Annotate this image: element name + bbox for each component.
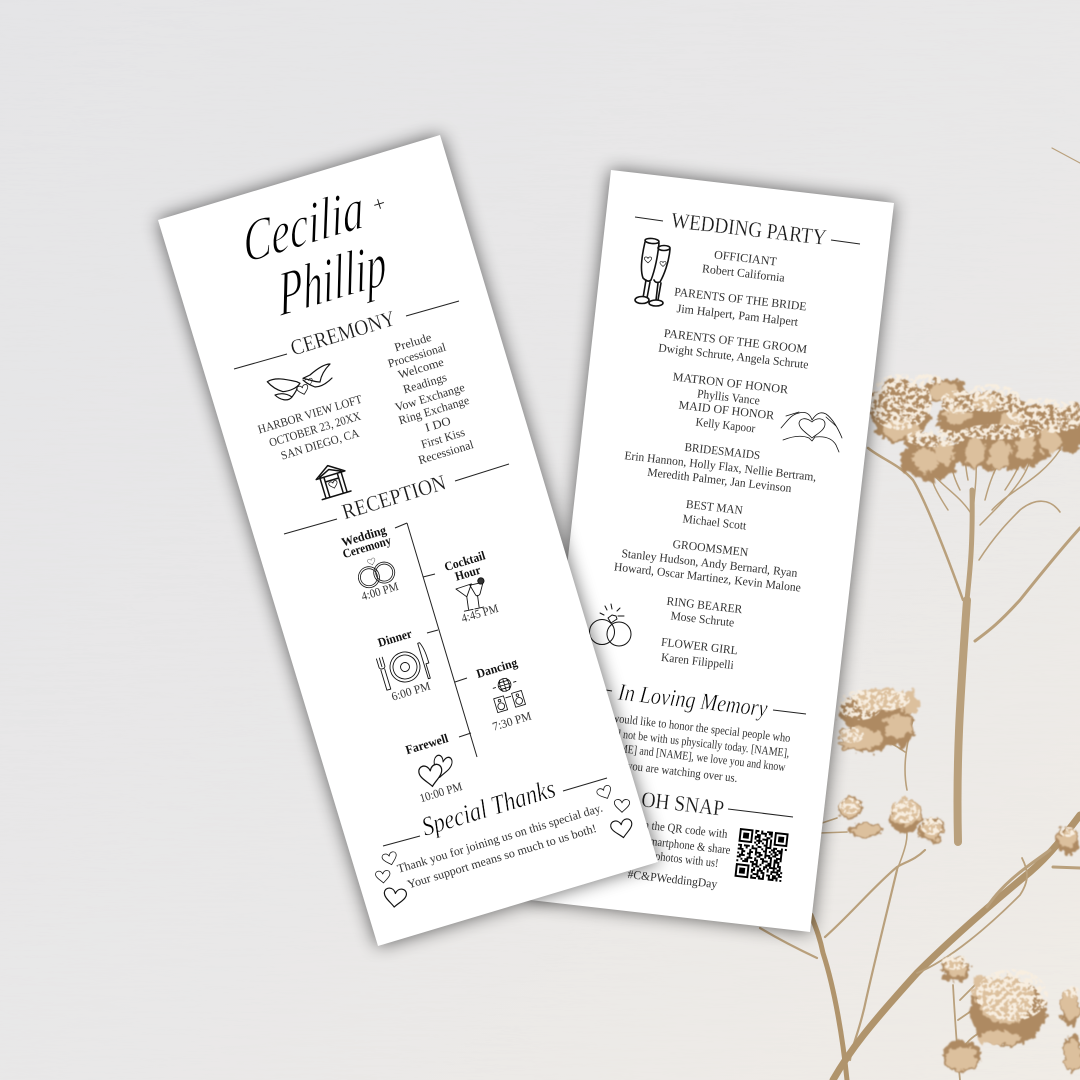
text: ring bearer: RING BEARER bbox=[666, 594, 743, 616]
panel: ceremony and reception card bbox=[158, 135, 658, 946]
event: wedding ceremony bbox=[340, 523, 400, 603]
title: couple names bbox=[241, 175, 390, 330]
heading: ceremony bbox=[234, 301, 459, 369]
heading: ceremony: CEREMONY bbox=[288, 305, 398, 360]
text: officiant: OFFICIANT bbox=[713, 248, 778, 269]
card shadow: left card bbox=[158, 135, 658, 946]
event: dinner bbox=[376, 626, 433, 704]
names: groomsmen line 2: Howard, Oscar Martinez, Kevin Malone bbox=[613, 559, 802, 595]
text: maid of honor: MAID OF HONOR bbox=[678, 398, 775, 422]
ceremony order list bbox=[386, 330, 476, 467]
event: cocktail hour: Cocktail bbox=[443, 548, 487, 574]
event: farewell: Farewell bbox=[404, 731, 450, 757]
event: dinner: Dinner bbox=[376, 626, 414, 650]
ceremony order list: Vow Exchange bbox=[393, 380, 466, 414]
event: cocktail hour bbox=[443, 548, 500, 625]
flower stems bbox=[760, 148, 1080, 1080]
text: qr instructions: your smartphone & share bbox=[622, 831, 731, 857]
card shadow: right card bbox=[530, 170, 894, 932]
ceremony order list: Readings bbox=[401, 370, 449, 396]
ceremony order list: Ring Exchange bbox=[397, 393, 471, 427]
names: bridesmaids line 1: Erin Hannon, Holly Flax, Nellie Bertram, bbox=[624, 448, 817, 484]
name: kelly kapoor: Kelly Kapoor bbox=[695, 415, 756, 435]
ceremony order list: First Kiss bbox=[419, 425, 467, 451]
event: dinner: 6:00 PM bbox=[390, 679, 432, 704]
text: bridesmaids: BRIDESMAIDS bbox=[684, 440, 761, 462]
text: date: OCTOBER 23, 20XX bbox=[267, 409, 363, 450]
event: dancing: Dancing bbox=[475, 655, 520, 681]
qr code bbox=[735, 829, 789, 881]
heading: special thanks: Special Thanks bbox=[418, 773, 559, 842]
icon: house with heart bbox=[313, 461, 351, 500]
flower clumps: dark base bbox=[838, 379, 1080, 1072]
ceremony order list: Prelude bbox=[393, 330, 433, 354]
memorial paragraph: [NAME] and [NAME], we love you and know bbox=[601, 739, 787, 774]
text: flower girl: FLOWER GIRL bbox=[660, 635, 738, 657]
icon: champagne flutes bbox=[635, 238, 670, 306]
title: couple names: Phillip bbox=[275, 227, 389, 330]
flower clumps: pale tan cups bbox=[838, 382, 1080, 1070]
name: karen filippelli: Karen Filippelli bbox=[660, 650, 735, 672]
text: hashtag: #C&PWeddingDay bbox=[627, 867, 718, 891]
text: matron of honor: MATRON OF HONOR bbox=[672, 370, 789, 397]
ceremony order list: Welcome bbox=[396, 355, 445, 382]
text: qr instructions: your photos with us! bbox=[633, 846, 719, 870]
heading: wedding party: WEDDING PARTY bbox=[670, 207, 828, 250]
heading: oh snap: OH SNAP bbox=[640, 786, 725, 821]
memorial paragraph: We would like to honor the special people who bbox=[595, 709, 791, 745]
event: cocktail hour: Hour bbox=[453, 563, 483, 584]
name: mose schrute: Mose Schrute bbox=[670, 608, 735, 630]
text: venue: HARBOR VIEW LOFT bbox=[256, 392, 364, 436]
names: groomsmen line 1: Stanley Hudson, Andy Bernard, Ryan bbox=[621, 546, 798, 580]
name: phyllis vance: Phyllis Vance bbox=[696, 387, 761, 408]
event: dancing bbox=[475, 655, 533, 734]
dried flowers bbox=[760, 148, 1080, 1080]
name: michael scott: Michael Scott bbox=[682, 511, 748, 533]
names: bride's parents: Jim Halpert, Pam Halpert bbox=[676, 301, 800, 329]
name: robert california: Robert California bbox=[701, 261, 786, 285]
icon: doves with hearts bbox=[267, 364, 332, 400]
event: wedding ceremony: 4:00 PM bbox=[360, 579, 400, 603]
flower clumps: cream speckles bbox=[838, 374, 1080, 1021]
text: best man: BEST MAN bbox=[685, 497, 744, 517]
heading: reception bbox=[284, 464, 509, 534]
timeline axis bbox=[395, 523, 477, 757]
panel: wedding party card bbox=[530, 170, 894, 932]
heading: reception: RECEPTION bbox=[339, 469, 449, 524]
ceremony order list: I DO bbox=[423, 414, 453, 435]
card surface bbox=[158, 135, 658, 946]
title: couple names: Cecilia bbox=[241, 175, 366, 276]
event: farewell bbox=[404, 731, 464, 805]
heading: special thanks bbox=[383, 773, 607, 846]
icons: hearts right bbox=[596, 784, 634, 839]
text: qr instructions bbox=[622, 816, 731, 870]
event: cocktail hour: 4:45 PM bbox=[460, 601, 500, 625]
heading: in loving memory: In Loving Memory bbox=[616, 680, 769, 722]
ceremony order list: Recessional bbox=[417, 437, 476, 467]
names: bridesmaids line 2: Meredith Palmer, Jan Levinson bbox=[647, 465, 792, 495]
text: thanks message line 1: Thank you for joining us on this special day. bbox=[395, 801, 604, 876]
heading: oh snap bbox=[640, 786, 793, 821]
icon: diamond rings bbox=[590, 604, 631, 646]
text: thanks message line 2: Your support means so much to us both! bbox=[406, 821, 598, 891]
memorial paragraph: could not be with us physically today. [NAME], bbox=[598, 724, 790, 760]
event: wedding ceremony: Ceremony bbox=[341, 533, 393, 561]
text: groomsmen: GROOMSMEN bbox=[672, 537, 749, 559]
names: groom's parents: Dwight Schrute, Angela Schrute bbox=[658, 341, 809, 372]
icons: hearts left bbox=[375, 851, 407, 908]
text: parents of the groom: PARENTS OF THE GROOM bbox=[663, 326, 808, 356]
card surface bbox=[530, 170, 894, 932]
memorial paragraph bbox=[595, 709, 791, 785]
text: location: SAN DIEGO, CA bbox=[279, 426, 361, 463]
event: farewell: 10:00 PM bbox=[418, 779, 464, 805]
title: couple names: + bbox=[368, 190, 390, 218]
event: wedding ceremony: Wedding bbox=[340, 523, 389, 550]
memorial paragraph: that you are watching over us. bbox=[607, 756, 738, 785]
text: qr instructions: Scan the QR code with bbox=[627, 816, 728, 841]
icon: heart hands bbox=[781, 412, 842, 452]
event: dancing: 7:30 PM bbox=[491, 709, 533, 734]
ceremony order list: Processional bbox=[386, 340, 448, 371]
text: parents of the bride: PARENTS OF THE BRIDE bbox=[674, 285, 807, 314]
